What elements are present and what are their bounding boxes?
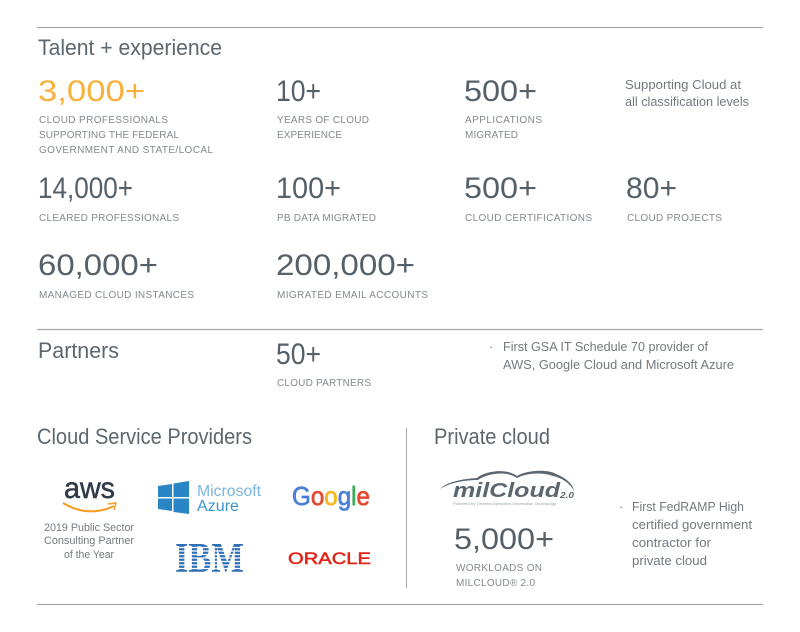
text: classification levels: [625, 77, 749, 109]
bullet: GSA schedule: First GSA IT Schedule 70 provider of: [503, 339, 708, 354]
stat: 3,000+ cloud professionals: CLOUD PROFESSIONALS: [39, 115, 168, 126]
bullet: GSA schedule: [489, 339, 734, 372]
bullet: GSA schedule: ·: [489, 339, 493, 354]
stat: 10+ years: EXPERIENCE: [277, 130, 342, 141]
stat: 14,000+: [38, 172, 179, 224]
stat: 500+ certifications: CLOUD CERTIFICATIONS: [465, 213, 592, 224]
logo: IBM: IBM: [175, 536, 244, 582]
logo: Microsoft Azure: [158, 481, 262, 515]
stat: 500+ applications: MIGRATED: [465, 130, 518, 141]
bullet: FedRAMP: [619, 499, 752, 568]
logo: Microsoft Azure: Azure: [197, 498, 239, 515]
logo: Google: Google: [292, 481, 370, 511]
stat: 14,000+: CLEARED PROFESSIONALS: [39, 213, 179, 224]
logo: AWS: aws: [64, 472, 115, 505]
stat: 50+ partners: CLOUD PARTNERS: [277, 378, 371, 389]
stat: 60,000+: MANAGED CLOUD INSTANCES: [39, 290, 194, 301]
logo: milCloud 2.0: 2.0: [559, 491, 575, 500]
stat: 5,000+ workloads: WORKLOADS ON: [456, 563, 542, 574]
stat: 500+ applications: 500+: [464, 75, 537, 108]
stat: 200,000+: MIGRATED EMAIL ACCOUNTS: [277, 290, 428, 301]
stat: 500+ applications: APPLICATIONS: [465, 115, 542, 126]
stat: 10+ years: [276, 75, 369, 141]
stat: 80+: CLOUD PROJECTS: [627, 213, 722, 224]
bullet: FedRAMP: First FedRAMP High: [632, 499, 744, 514]
heading: Talent + experience: Talent + experience: [38, 35, 222, 60]
caption: AWS award: [44, 522, 134, 561]
stat: 5,000+ workloads: MILCLOUD® 2.0: [456, 578, 535, 589]
stat: 50+ partners: 50+: [276, 338, 321, 371]
stat: 80+: 80+: [626, 172, 677, 205]
stat: 5,000+ workloads: 5,000+: [454, 523, 554, 556]
stat: 100+: 100+: [276, 172, 341, 205]
stat: 80+: [626, 172, 722, 224]
stat: 100+: PB DATA MIGRATED: [277, 213, 376, 224]
stat: 14,000+: 14,000+: [38, 172, 133, 205]
stat: 200,000+: 200,000+: [276, 249, 415, 282]
stat: 100+: [276, 172, 376, 224]
logo: milCloud 2.0: Powered by General Dynamics Information Technology: [453, 502, 556, 506]
stat: 60,000+: [38, 249, 194, 301]
heading: Private cloud: Private cloud: [434, 424, 550, 449]
stat: 500+ certifications: [464, 172, 592, 224]
caption: AWS award: Consulting Partner: [44, 535, 134, 547]
text: classification levels: all classification levels: [625, 94, 749, 109]
stat: 10+ years: 10+: [276, 75, 321, 108]
stat: 3,000+ cloud professionals: GOVERNMENT AND STATE/LOCAL: [39, 145, 213, 156]
logo: Microsoft Azure: Microsoft: [197, 483, 262, 500]
stat: 500+ applications: [464, 75, 542, 141]
logo: Oracle: ORACLE: [288, 550, 371, 568]
bullet: FedRAMP: ·: [619, 499, 623, 514]
stat: 3,000+ cloud professionals: SUPPORTING THE FEDERAL: [39, 130, 179, 141]
stat: 500+ certifications: 500+: [464, 172, 537, 205]
stat: 10+ years: YEARS OF CLOUD: [277, 115, 369, 126]
heading: Partners: Partners: [38, 338, 119, 363]
caption: AWS award: 2019 Public Sector: [44, 522, 134, 534]
bullet: GSA schedule: AWS, Google Cloud and Microsoft Azure: [503, 357, 734, 372]
logo: milCloud 2.0: [440, 471, 575, 506]
bullet: FedRAMP: private cloud: [632, 553, 707, 568]
caption: AWS award: of the Year: [64, 549, 114, 561]
logo: milCloud 2.0: milCloud: [453, 480, 561, 502]
bullet: FedRAMP: contractor for: [632, 535, 712, 550]
stat: 3,000+ cloud professionals: [38, 75, 213, 156]
stat: 200,000+: [276, 249, 428, 301]
stat: 5,000+ workloads: [454, 523, 554, 589]
stat: 3,000+ cloud professionals: 3,000+: [38, 75, 145, 108]
stat: 60,000+: 60,000+: [38, 249, 158, 282]
text: classification levels: Supporting Cloud at: [625, 77, 741, 92]
stat: 50+ partners: [276, 338, 371, 389]
bullet: FedRAMP: certified government: [632, 517, 752, 532]
heading: Cloud Service Providers: Cloud Service Providers: [37, 424, 252, 449]
